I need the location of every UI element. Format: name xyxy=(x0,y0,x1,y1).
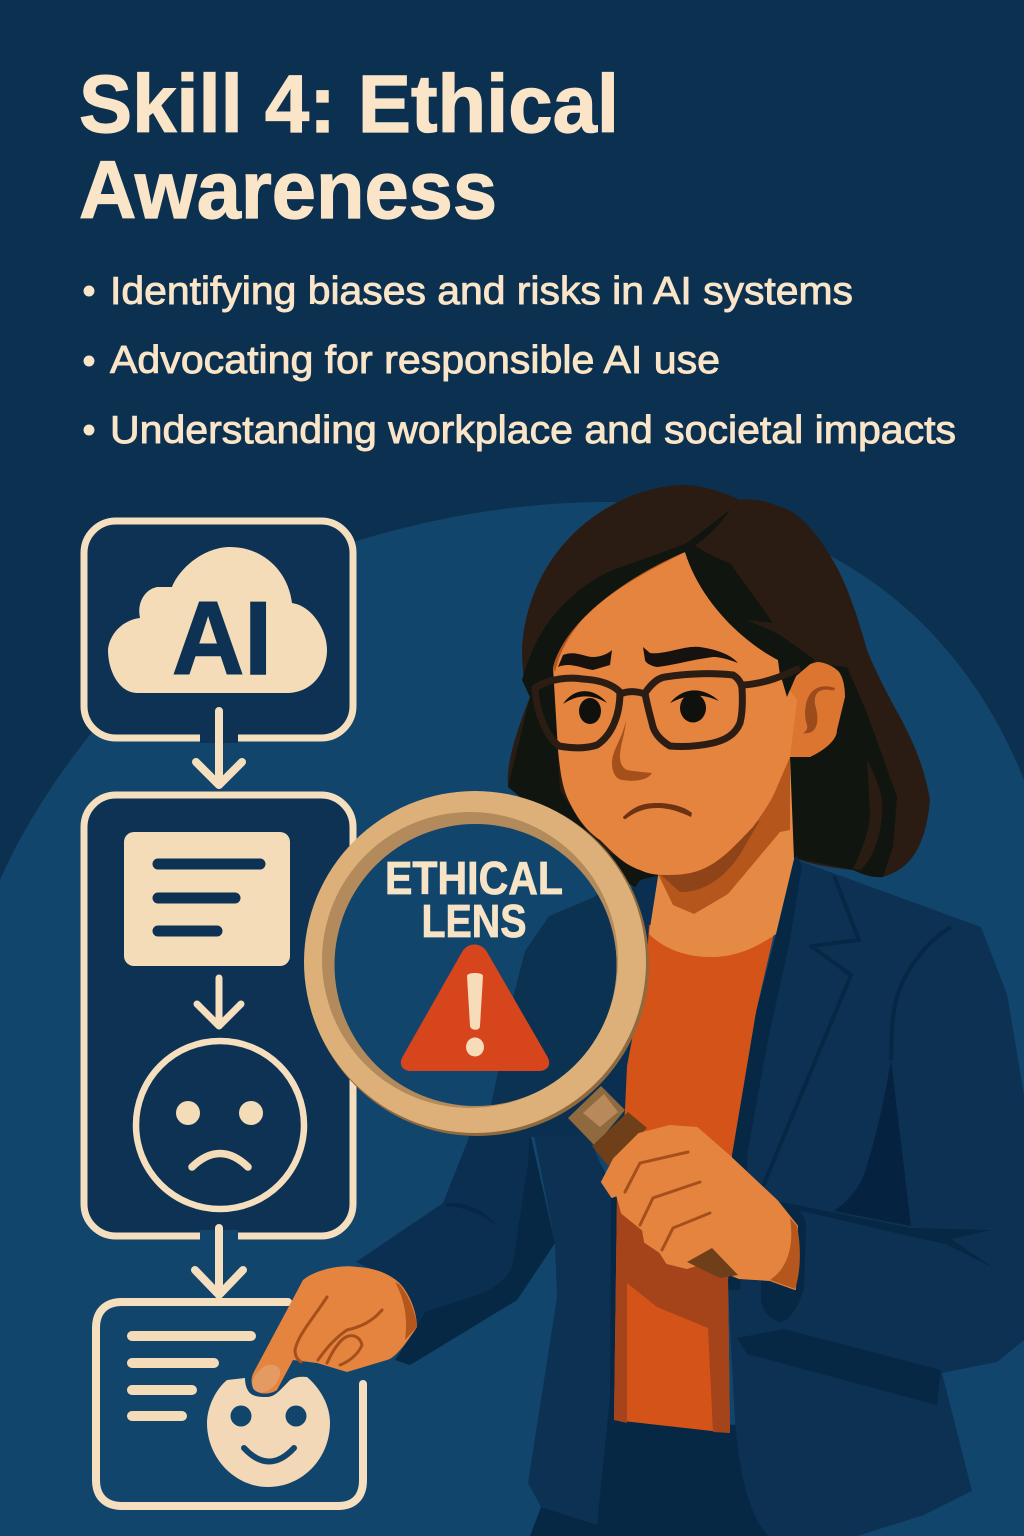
bullet list: Advocating for responsible AI use xyxy=(110,339,720,382)
neck shadow xyxy=(650,757,790,914)
jacket left sleeve xyxy=(356,1133,555,1365)
icon: smiling face xyxy=(207,1377,330,1487)
icon: document card xyxy=(124,832,290,966)
lens text: ETHICAL LENS xyxy=(385,852,563,947)
eyebrows xyxy=(558,650,612,670)
neck xyxy=(649,757,794,957)
jacket right body xyxy=(728,860,1024,1536)
icon: warning triangle xyxy=(401,944,549,1071)
arrow: document to face xyxy=(197,978,241,1026)
shirt xyxy=(614,925,776,1433)
report text lines xyxy=(132,1336,251,1416)
lapel lines xyxy=(761,876,951,1191)
magnifier rim xyxy=(305,792,649,1136)
title xyxy=(79,59,619,236)
icon: sad face xyxy=(136,1041,304,1209)
hair dark right xyxy=(782,660,897,877)
holding hand xyxy=(602,1126,800,1289)
sleeve creases xyxy=(737,1202,994,1405)
jacket seen through lens xyxy=(491,894,616,1106)
lens interior xyxy=(334,824,616,1106)
shirt shadow xyxy=(614,1195,732,1433)
hair dark band xyxy=(522,510,730,700)
lens text: ETHICAL LENS: LENS xyxy=(422,895,526,947)
sleeve triangle shadow xyxy=(834,1060,911,1226)
bullet list xyxy=(84,270,956,452)
jacket front left xyxy=(528,1130,613,1525)
woman illustration xyxy=(356,485,1024,1536)
finger creases xyxy=(295,1297,382,1365)
flow box: AI cloud xyxy=(84,521,353,743)
glasses xyxy=(535,668,800,748)
pants xyxy=(530,1420,770,1536)
upper left shoulder xyxy=(468,880,660,1137)
lens text: ETHICAL LENS: ETHICAL xyxy=(385,852,563,904)
pointing hand xyxy=(252,1266,417,1394)
bullet list: Understanding workplace and societal impacts xyxy=(110,409,956,452)
arrow: face to report xyxy=(195,1228,243,1295)
arrow: cloud to document xyxy=(196,711,242,785)
flow box: biased output xyxy=(84,795,353,1241)
magnifier handle xyxy=(568,1086,647,1166)
icon: AI cloud: AI xyxy=(172,581,272,697)
icon: AI cloud xyxy=(108,547,327,697)
forehead shadow xyxy=(553,552,685,672)
background arc xyxy=(0,502,1024,1536)
collar shadow xyxy=(727,856,802,1290)
ear xyxy=(790,662,845,757)
title: Skill 4: Ethical xyxy=(79,59,619,150)
bullet list: Identifying biases and risks in AI systems xyxy=(110,270,853,313)
nose xyxy=(612,720,652,781)
hair dark hairline xyxy=(685,545,815,697)
fingertip xyxy=(252,1365,280,1392)
jacket by neck xyxy=(600,875,660,1010)
flow box: corrected report xyxy=(96,1302,363,1506)
hair dark left xyxy=(508,660,668,892)
sleeve dark band xyxy=(395,1133,555,1365)
eyes xyxy=(563,690,719,724)
magnifying glass xyxy=(304,791,649,1166)
hair back xyxy=(508,485,930,890)
face xyxy=(553,552,797,875)
flow diagram xyxy=(84,521,363,1506)
cuff xyxy=(761,1202,806,1322)
finger creases xyxy=(625,1152,710,1250)
mouth xyxy=(623,803,692,819)
title: Awareness xyxy=(79,145,497,236)
